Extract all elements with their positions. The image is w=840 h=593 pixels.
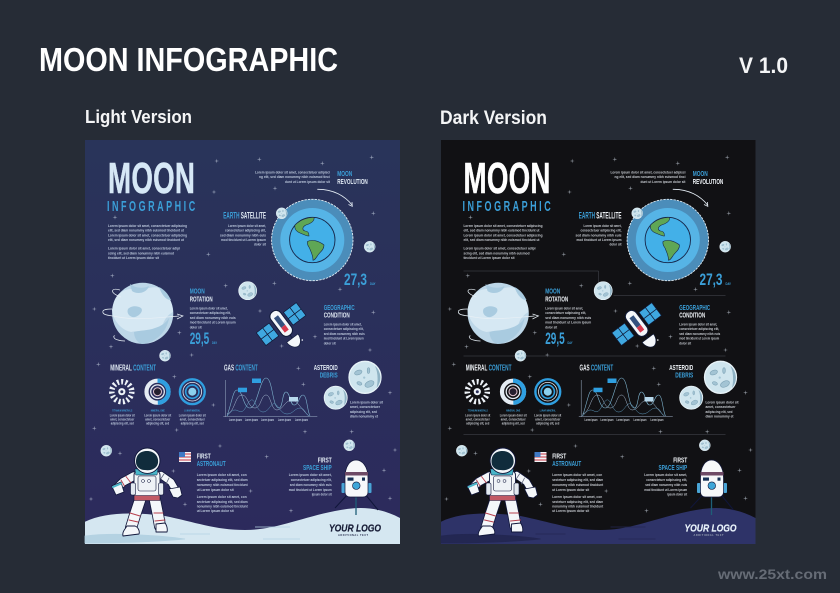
first astronaut text: sectetuer adipiscing elit, sed diam	[552, 500, 603, 504]
first astronaut text: nonummy nibh euismod tincidunt	[197, 483, 248, 487]
intro text: tincidunt ut Lorem ipsum dolor sit	[108, 256, 160, 260]
chart axis labels: Lorem ipsum	[634, 418, 646, 422]
arrow: revolution	[317, 189, 352, 206]
first astronaut text: Lorem ipsum dolor sit amet, con	[552, 495, 602, 499]
moon rotation text: sed diam nonummy nibh euis	[190, 316, 236, 320]
logo: YOUR LOGO	[684, 523, 736, 535]
moon rotation text: Lorem ipsum dolor sit amet,	[545, 306, 583, 310]
icon: small moon	[344, 440, 355, 451]
moon rotation text: consectetuer adipiscing elit,	[545, 311, 586, 315]
icon: small moon	[632, 208, 643, 219]
asteroid debris heading	[669, 363, 694, 380]
icon: satellite	[608, 297, 673, 362]
first space ship text: Lorem ipsum dolor sit amet,	[644, 473, 687, 477]
icon: small moon	[515, 350, 526, 361]
chart axis labels: Lorem ipsum	[616, 418, 630, 422]
mineral captions: Lorem ipsum dolor sit	[465, 414, 491, 418]
asteroid debris heading: DEBRIS	[675, 371, 693, 380]
moon rotation text: mod tincidunt ut Lorem ipsum	[545, 321, 591, 325]
gas content heading: GAS CONTENT	[580, 362, 614, 372]
astronaut illustration	[112, 448, 182, 536]
mineral captions: amet, consectetuer	[145, 418, 171, 422]
geographic condition text: consectetuer adipiscing elit,	[679, 327, 719, 331]
first astronaut text: Lorem ipsum dolor sit amet, con	[197, 473, 247, 477]
mineral content heading: MINERAL CONTENT	[110, 362, 156, 372]
first space ship text: mod tincidunt ut Lorem ipsum	[289, 488, 332, 492]
first space ship text: sed diam nonummy nibh euis	[645, 483, 687, 487]
space ship illustration	[690, 460, 734, 515]
first space ship text: ipsum dolor sit	[312, 492, 332, 496]
mineral captions: LUNAR MINERAL	[540, 408, 556, 412]
asteroid text: adipiscing elit, sed	[350, 410, 377, 414]
watermark: www.25xt.com	[717, 566, 827, 582]
first astronaut text: sectetuer adipiscing elit, sed diam	[197, 478, 248, 482]
icon: small moon	[160, 350, 170, 361]
mineral captions: LUNAR MINERAL	[184, 408, 200, 412]
asteroid text: amet, consectetuer	[350, 405, 381, 409]
first astronaut text: ut Lorem ipsum dolor sit	[197, 488, 234, 492]
heading: dark version: Dark Version	[440, 108, 547, 129]
mineral captions: Lorem ipsum dolor sit	[144, 414, 172, 418]
first space ship text: SPACE SHIP	[658, 463, 687, 472]
intro text	[464, 224, 542, 260]
asteroid text: diam nonummy et	[350, 414, 379, 418]
icon: small moon	[456, 445, 467, 456]
moon revolution text	[255, 169, 368, 186]
gas content heading: GAS CONTENT	[224, 362, 258, 372]
logo: ADDITIONAL TEXT	[694, 534, 724, 537]
geographic condition text	[324, 303, 365, 345]
stat: 29,5 day: 29,5	[545, 329, 565, 348]
chart axis labels: Lorem ipsum	[584, 418, 598, 422]
icon: moon	[103, 283, 183, 344]
earth satellite text: sed diam nonummy nibh euis	[576, 233, 622, 237]
icon: flag	[179, 452, 191, 462]
earth satellite text: mod tincidunt ut Lorem ipsum	[221, 238, 266, 242]
geographic condition text: CONDITION	[324, 311, 350, 320]
connector lines	[464, 271, 726, 434]
first astronaut text	[197, 451, 248, 513]
intro text: tincidunt ut Lorem ipsum dolor sit	[464, 256, 515, 260]
asteroid text: adipiscing elit, sed	[706, 410, 732, 414]
first astronaut text: Lorem ipsum dolor sit amet, con	[197, 495, 247, 499]
moon rotation text	[545, 287, 591, 329]
moon rotation text: ROTATION	[545, 294, 568, 303]
intro text: Lorem ipsum dolor sit amet, consectetuer adipiscing	[108, 233, 187, 237]
chart: mineral rings	[112, 379, 205, 404]
first space ship text: Lorem ipsum dolor sit amet,	[289, 473, 332, 477]
icon: flag	[534, 452, 546, 462]
moon surface	[441, 508, 756, 544]
logo: YOUR LOGO	[329, 523, 381, 535]
geographic condition text: GEOGRAPHIC	[324, 303, 355, 312]
mineral captions	[465, 408, 562, 426]
chart axis labels: Lorem ipsum	[600, 418, 614, 422]
stat: 27,3 day: 27,3	[344, 270, 367, 289]
earth satellite text: consectetuer adipiscing elit,	[225, 229, 266, 233]
intro text: elit, sed diam nonummy nibh euismod tincidunt ut	[108, 228, 185, 232]
chart axis labels: Lorem ipsum	[650, 418, 664, 422]
astronaut illustration	[467, 448, 538, 536]
mineral content heading: MINERAL CONTENT	[466, 362, 512, 372]
chart: gas content lines	[223, 378, 317, 417]
surface shadows	[85, 527, 300, 543]
stat: 27,3 day: DAY	[726, 282, 732, 286]
chart: mineral rings	[467, 379, 560, 404]
asteroid text: Lorem ipsum dolor sit	[350, 400, 384, 404]
first astronaut text: sectetuer adipiscing elit, sed diam	[197, 500, 248, 504]
moon revolution text: ng elit, sed diam nonummy nibh euismod tinci	[259, 175, 330, 179]
stat: 29,5 day: DAY	[212, 341, 217, 345]
first astronaut text: ASTRONAUT	[552, 459, 581, 468]
mineral captions: Lorem ipsum dolor sit	[500, 414, 527, 418]
mineral captions: adipiscing elit, sed	[111, 422, 134, 426]
intro text: Lorem ipsum dolor sit amet, consectetuer adipiscing	[108, 224, 187, 228]
geographic condition text: CONDITION	[679, 311, 705, 320]
moon revolution text: REVOLUTION	[693, 177, 723, 186]
first space ship text	[289, 455, 332, 496]
geographic condition text: mod tincidunt ut Lorem ipsum	[324, 337, 364, 341]
intro text: elit, sed diam nonummy nibh euismod tincidunt ut	[464, 238, 540, 242]
asteroid text: diam nonummy et	[706, 414, 734, 418]
earth satellite text: dolor sit	[254, 243, 267, 247]
moon surface	[85, 508, 400, 544]
mineral captions: Lorem ipsum dolor sit	[110, 414, 135, 418]
earth satellite text: EARTH SATELLITE	[223, 210, 266, 220]
first space ship text	[644, 455, 688, 496]
earth satellite text: EARTH SATELLITE	[579, 210, 622, 220]
first astronaut text: ut Lorem ipsum dolor sit	[552, 488, 590, 492]
earth satellite text: mod tincidunt ut Lorem ipsum	[576, 238, 622, 242]
icon: earth	[627, 199, 708, 281]
moon revolution text: REVOLUTION	[337, 177, 368, 186]
poster title: INFOGRAPHIC	[462, 198, 551, 215]
mineral captions: amet, consectetuer	[110, 418, 135, 422]
earth satellite text: Lorem ipsum dolor sit amet,	[584, 224, 622, 228]
intro text: scing elit, sed diam nonummy nibh euismod	[464, 251, 530, 255]
intro text: elit, sed diam nonummy nibh euismod tincidunt ut	[108, 238, 185, 242]
main title: MOON INFOGRAPHIC	[39, 41, 338, 78]
icon: small moon	[276, 208, 287, 219]
intro text: Lorem ipsum dolor sit amet, consectetuer adipiscing	[464, 233, 542, 237]
asteroid text	[706, 400, 739, 418]
panel: dark version poster	[441, 140, 756, 544]
first astronaut text: nonummy nibh euismod tincidunt	[552, 504, 604, 508]
moon rotation text: MOON	[190, 287, 205, 296]
icon: large asteroid	[349, 361, 381, 393]
chart: gas content lines	[579, 378, 673, 417]
intro text: Lorem ipsum dolor sit amet, consectetuer adipi	[108, 246, 180, 250]
moon revolution text: MOON	[337, 169, 352, 178]
first space ship text: ipsum dolor sit	[667, 492, 688, 496]
asteroid debris heading: ASTEROID	[314, 363, 338, 372]
heading: light version: Light Version	[85, 107, 192, 127]
first astronaut text: ut Lorem ipsum dolor sit	[552, 509, 590, 513]
geographic condition text: dolor sit	[324, 341, 336, 345]
icon: small moon	[699, 440, 710, 451]
intro text: scing elit, sed diam nonummy nibh euismod	[108, 251, 174, 255]
intro text: Lorem ipsum dolor sit amet, consectetuer adipi	[464, 246, 536, 250]
asteroid text	[350, 400, 384, 418]
earth satellite text	[220, 210, 267, 247]
first astronaut text: FIRST	[552, 451, 566, 460]
icon: small asteroid	[324, 386, 347, 409]
icon: small moon	[239, 282, 257, 300]
space ship illustration	[335, 460, 378, 515]
moon rotation text: ROTATION	[190, 294, 213, 303]
first astronaut text: ASTRONAUT	[197, 459, 226, 468]
moon rotation text: mod tincidunt ut Lorem ipsum	[190, 321, 236, 325]
earth satellite text: Lorem ipsum dolor sit amet,	[228, 224, 266, 228]
mineral captions: adipiscing elit, sed	[536, 422, 559, 426]
geographic condition text: sed diam nonummy nibh euis	[324, 332, 365, 336]
earth satellite text: consectetuer adipiscing elit,	[580, 229, 622, 233]
first space ship text: FIRST	[673, 455, 687, 464]
logo: ADDITIONAL TEXT	[338, 534, 368, 537]
poster title: MOON	[464, 154, 550, 203]
mineral captions	[110, 408, 206, 426]
intro text: elit, sed diam nonummy nibh euismod tincidunt ut	[464, 228, 540, 232]
first astronaut text: Lorem ipsum dolor sit amet, con	[552, 473, 602, 477]
icon: small moon	[101, 445, 112, 456]
chart axis labels	[584, 418, 664, 422]
mineral captions: adipiscing elit, sed	[466, 422, 489, 426]
first astronaut text	[552, 451, 604, 513]
moon revolution text: dunt ut Lorem ipsum dolor sit	[285, 180, 331, 184]
moon rotation text: dolor sit	[545, 325, 558, 329]
first astronaut text: sectetuer adipiscing elit, sed diam	[552, 478, 603, 482]
moon revolution text: ng elit, sed diam nonummy nibh euismod tinci	[614, 175, 686, 179]
asteroid debris heading	[314, 363, 338, 380]
moon rotation text: Lorem ipsum dolor sit amet,	[190, 306, 228, 310]
chart axis labels: Lorem ipsum	[295, 418, 308, 422]
moon revolution text: Lorem ipsum dolor sit amet, consectetuer adipisci	[255, 170, 330, 174]
first astronaut text: nonummy nibh euismod tincidunt	[197, 504, 248, 508]
mineral captions: amet, consectetuer	[501, 418, 526, 422]
mineral captions: MINERAL ONE	[506, 408, 520, 412]
mineral captions: Lorem ipsum dolor sit	[179, 414, 206, 418]
arrow: revolution	[673, 189, 708, 206]
icon: small asteroid	[680, 386, 703, 409]
poster title: INFOGRAPHIC	[107, 198, 195, 215]
asteroid debris heading: DEBRIS	[320, 371, 338, 380]
moon rotation text	[190, 287, 236, 329]
chart axis labels: Lorem ipsum	[278, 418, 291, 422]
surface shadows	[441, 527, 656, 543]
icon: large asteroid	[704, 361, 736, 393]
version label: V 1.0	[739, 53, 788, 78]
earth satellite text: dolor sit	[610, 243, 622, 247]
chart axis labels: Lorem ipsum	[229, 418, 242, 422]
intro text: Lorem ipsum dolor sit amet, consectetuer adipiscing	[464, 224, 542, 228]
stat: 29,5 day: DAY	[568, 341, 573, 345]
asteroid text: amet, consectetuer	[706, 405, 736, 409]
mineral captions: amet, consectetuer	[535, 418, 561, 422]
geographic condition text: dolor sit	[679, 341, 692, 345]
geographic condition text: GEOGRAPHIC	[679, 303, 711, 312]
earth satellite text	[576, 210, 622, 247]
first astronaut text: nonummy nibh euismod tincidunt	[552, 483, 604, 487]
moon revolution text	[610, 169, 723, 186]
icon: small moon	[594, 282, 612, 300]
mineral captions: Lorem ipsum dolor sit	[534, 414, 562, 418]
first space ship text: mod tincidunt ut Lorem ipsum	[644, 488, 687, 492]
geographic condition text: Lorem ipsum dolor sit amet,	[324, 322, 362, 326]
chart axis labels	[229, 418, 308, 422]
earth satellite text: sed diam nonummy nibh euis	[220, 233, 266, 237]
stat: 29,5 day: 29,5	[190, 329, 209, 348]
geographic condition text: mod tincidunt ut Lorem ipsum	[679, 337, 719, 341]
geographic condition text	[679, 303, 720, 345]
asteroid debris heading: ASTEROID	[669, 363, 694, 372]
icon: earth	[272, 199, 353, 281]
mineral captions: amet, consectetuer	[466, 418, 490, 422]
moon rotation text: MOON	[545, 287, 560, 296]
moon rotation text: sed diam nonummy nibh euis	[545, 316, 591, 320]
first astronaut text: ut Lorem ipsum dolor sit	[197, 509, 234, 513]
first space ship text: sed diam nonummy nibh euis	[290, 483, 332, 487]
first space ship text: consectetuer adipiscing elit,	[646, 478, 687, 482]
stat: 27,3 day: 27,3	[700, 270, 722, 289]
icon: satellite	[252, 297, 318, 362]
panel: light version poster	[85, 140, 400, 544]
mineral captions: MINERAL ONE	[151, 408, 165, 412]
moon rotation text: dolor sit	[190, 325, 202, 329]
moon revolution text: MOON	[693, 169, 708, 178]
icon: moon	[458, 283, 538, 344]
first space ship text: FIRST	[318, 455, 332, 464]
moon rotation text: consectetuer adipiscing elit,	[190, 311, 231, 315]
moon revolution text: Lorem ipsum dolor sit amet, consectetuer adipisci	[610, 170, 686, 174]
mineral captions: adipiscing elit, sed	[146, 422, 169, 426]
first space ship text: SPACE SHIP	[303, 463, 332, 472]
chart axis labels: Lorem ipsum	[245, 418, 258, 422]
icon: small moon	[364, 241, 375, 252]
chart axis labels: Lorem ipsum	[261, 418, 274, 422]
icon: small moon	[720, 241, 731, 252]
first space ship text: consectetuer adipiscing elit,	[291, 478, 332, 482]
poster title: MOON	[108, 154, 195, 203]
mineral captions: TITANIUM MINERALS	[112, 408, 132, 412]
asteroid text: Lorem ipsum dolor sit	[706, 400, 739, 404]
geographic condition text: consectetuer adipiscing elit,	[324, 327, 364, 331]
mineral captions: adipiscing elit, sed	[502, 422, 525, 426]
geographic condition text: Lorem ipsum dolor sit amet,	[679, 322, 717, 326]
stat: 27,3 day: DAY	[370, 282, 376, 286]
intro text	[108, 224, 187, 260]
mineral captions: TITANIUM MINERALS	[468, 408, 488, 412]
geographic condition text: sed diam nonummy nibh euis	[679, 332, 720, 336]
moon revolution text: dunt ut Lorem ipsum dolor sit	[640, 180, 686, 184]
first astronaut text: FIRST	[197, 451, 211, 460]
mineral captions: amet, consectetuer	[180, 418, 205, 422]
mineral captions: adipiscing elit, sed	[181, 422, 204, 426]
